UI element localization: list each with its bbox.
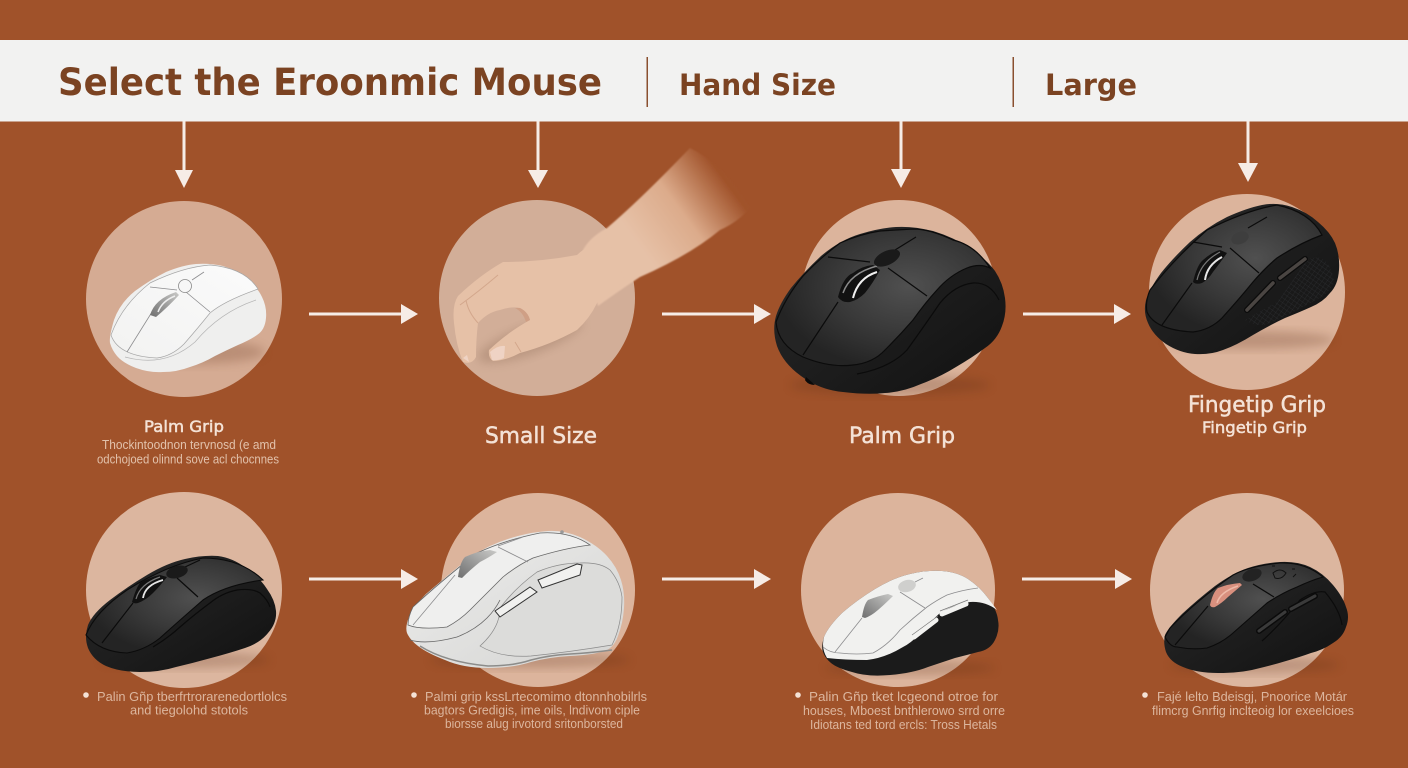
label: Palm Grip (849, 424, 955, 449)
divider: large (1012, 57, 1014, 107)
circle backdrop (801, 493, 995, 687)
circle backdrop (441, 493, 635, 687)
description: houses, Mboest bnthlerowo srrd orre (803, 704, 1005, 718)
circle backdrop (86, 201, 282, 397)
arrow: down 1 (175, 121, 193, 188)
description: Idiotans ted tord ercls: Tross Hetals (810, 718, 997, 732)
panel: small size hand (439, 148, 750, 449)
description (97, 438, 279, 466)
icon: hand (454, 148, 750, 372)
panel: palm grip white mouse (86, 201, 282, 466)
icon: black mouse with pink wheel (1164, 562, 1348, 673)
header band (0, 40, 1408, 122)
label: Small Size (485, 424, 597, 449)
heading: hand size: Hand Size (679, 68, 836, 102)
panel: palm grip black mouse row 2 (83, 492, 287, 718)
arrow: down 4 (1238, 121, 1258, 182)
label: Fingetip Grip (1188, 393, 1326, 418)
description: odchojoed olinnd sove acl chocnnes (97, 452, 279, 466)
panel: fingertip grip black mouse (1145, 194, 1345, 437)
description: Palin Gñp tberfrtrorarenedortlolcs (97, 690, 287, 704)
heading: large: Large (1045, 68, 1137, 102)
arrow: row 1 second (662, 304, 771, 324)
circle backdrop (801, 200, 997, 396)
description: Palmi grip kssLrtecomimo dtonnhobilrls (425, 690, 647, 704)
description: bagtors Gredigis, ime oils, lndivom ciple (424, 704, 640, 718)
description (795, 690, 1005, 732)
panel: pink wheel mouse row 2 (1142, 493, 1354, 718)
description (1142, 690, 1354, 718)
bullet (83, 692, 89, 698)
circle backdrop (86, 492, 282, 688)
arrow: row 2 third (1022, 569, 1132, 589)
icon: black mouse large (774, 227, 1006, 395)
panel: palm grip black mouse (774, 200, 1006, 449)
sub label: Fingetip Grip (1202, 418, 1307, 437)
title: Select the Eroonmic Mouse (58, 61, 602, 104)
circle backdrop (439, 200, 635, 396)
description: and tiegolohd stotols (130, 704, 248, 718)
divider: hand size (646, 57, 648, 107)
arrow: row 2 first (309, 569, 418, 589)
circle backdrop (1150, 493, 1344, 687)
icon: white mouse (110, 264, 266, 372)
arrow: row 2 second (662, 569, 771, 589)
icon: white and black mouse (822, 571, 999, 676)
icon: black mouse with side buttons (1145, 204, 1339, 354)
arrow: row 1 first (309, 304, 418, 324)
label: Palm Grip (144, 417, 224, 436)
arrow: down 2 (528, 121, 548, 188)
panel: two tone mouse row 2 (795, 493, 1005, 732)
panel: palm grip white mouse row 2 (406, 493, 647, 731)
arrow: down 3 (891, 121, 911, 188)
description: Fajé lelto Bdeisgj, Pnoorice Motár (1157, 690, 1347, 704)
bullet (411, 692, 417, 698)
arrow: row 1 third (1023, 304, 1131, 324)
icon: black mouse (86, 556, 276, 672)
icon: white mouse large (406, 530, 630, 668)
description: flimcrg Gnrfig inclteoig lor exeelcioes (1152, 704, 1354, 718)
bullet (795, 692, 801, 698)
circle backdrop (1149, 194, 1345, 390)
bullet (1142, 692, 1148, 698)
description (411, 690, 647, 731)
description: Thockintoodnon tervnosd (e amd (102, 438, 276, 452)
description (83, 690, 287, 718)
description: Palin Gñp tket lcgeond otroe for (809, 690, 998, 704)
description: biorsse alug irvotord sritonborsted (445, 717, 623, 731)
